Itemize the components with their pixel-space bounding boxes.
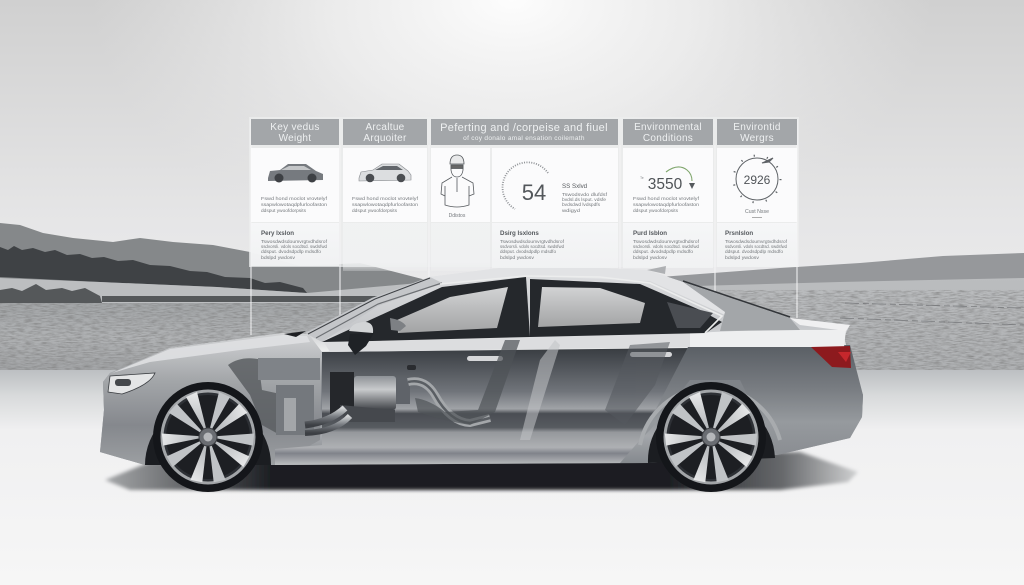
gauge side text: Tswodsvdo dlufdsf [562,192,608,197]
infographic panel board [249,117,799,335]
car: headlight [108,373,155,394]
heading: environmental conditions: Environmental [634,122,702,133]
heading: performance and fuel: Peferting and /corpeise and fiuel [440,122,608,134]
panel: environmental conditions [623,119,713,268]
landscape: left hills and field [0,223,700,371]
car: cutaway engine bay [228,340,520,435]
rear quarter panel [640,345,863,455]
heading: aerodynamic architecture [343,119,427,145]
heading: environmental weathers: Environtid [733,122,781,133]
gauge side text: bvdsl.ds lsput. vdsfe [562,197,607,202]
gauge side text [562,183,608,213]
metric: 3550 with green arrow: Te [640,176,644,180]
icon caption: Ddistos [449,213,466,219]
tree row [0,284,102,303]
exhaust pipe rear [408,381,490,423]
studio floor [0,370,1024,585]
rear wheel [656,382,766,492]
icon: driver figure [441,155,474,207]
panel: aerodynamic architecture [343,119,427,271]
subheading and text: ssdvorsli. vdols socdtsd. swdsfwd [261,244,328,249]
belt highlight band [322,334,690,352]
rear deck highlight [690,330,846,347]
subheading and text [633,230,700,260]
car: tail light [811,346,851,368]
gauge: 54: 54 [522,180,546,205]
spoiler [790,318,850,331]
icon: grey wagon car [268,164,323,182]
shark fin antenna [647,266,666,274]
rear roof sweep [683,282,800,331]
car: door handles [467,352,672,361]
heading: performance and fuel [431,119,618,145]
heading: environmental weathers [717,119,797,145]
heading: environmental weathers: Wergrs [740,133,774,144]
front wheel [153,382,263,492]
gauge side text: bvdsdwd lvdspdfs [562,202,601,207]
body text: ddsput ywoofdorpsits [261,208,307,213]
car: side mirror [348,318,406,355]
panel: environmental weathers [717,119,797,267]
front fender and bumper [100,333,322,465]
heading: key vehicle weight [251,119,339,145]
gauge: 54 [503,162,548,209]
heading: aerodynamic architecture: Arcaltue [365,122,405,133]
heading: performance and fuel: of coy donalo amal ensation coilemath [463,135,585,142]
subheading and text: bdslpd ywdosv [725,255,760,260]
subheading and text: bdslpd ywdosv [500,255,535,260]
cowl vent [284,331,306,337]
car: body silhouette [100,266,863,465]
car ground shadow [105,452,858,490]
subheading and text: ddsput. dvodsdpdlp mdsdfo [261,249,322,254]
dial caption [745,209,769,218]
shift knob [407,365,416,370]
dial caption: Cust Nsse [745,209,769,215]
door panels [275,348,690,465]
subheading and text: Purd Isblon [633,230,667,237]
subheading and text: ssdvorsli. vdols socdtsd. swdsfwd [500,244,565,249]
forest [0,246,307,293]
body text: Fswd hond moclot vrovtelyf [352,196,419,201]
subheading and text [261,230,328,260]
heading: key vehicle weight: Key vedus [270,122,320,133]
heading: aerodynamic architecture: Arquoiter [363,133,407,144]
metric: 3550 with green arrow: 3550 [648,176,683,193]
subheading and text: bdslpd ywdosv [261,255,296,260]
background wall [0,0,1024,372]
body text: ddsput ywoofdorpsits [633,208,679,213]
subheading and text: Pery Ixslon [261,230,294,237]
subheading and text: Prsnlslon [725,230,753,237]
subheading and text: ddsput. dvodsdpdlp mdsdfo [725,249,784,254]
panel: performance and fuel [431,119,618,271]
body text: Fswd hond moclot vrovtelyf [261,196,328,201]
car: window frames and glass [305,276,722,342]
machinery [340,405,395,422]
body text: Fswd hond moclot vrovtelyf [633,196,700,201]
body text [261,196,328,213]
subheading and text: ddsput. dvodsdpdlp mdsdfo [500,249,557,254]
panel: key vehicle weight [251,119,339,266]
subheading and text [725,230,788,260]
exhaust pipes front [305,408,345,425]
heading: environmental conditions: Conditions [643,133,693,144]
subheading and text [500,230,565,260]
heading: key vehicle weight: Weight [279,133,311,144]
subheading and text: Tswosdwdsdoumvrgtvdhdsrof [725,239,788,244]
front seat [415,340,520,425]
catalytic cylinder [354,376,396,410]
dial: 2926 [734,156,780,202]
subheading and text: Tswosdwdsdoumvrgtvdhdsrof [633,239,700,244]
roof highlight [430,268,725,315]
body text: ssapwlowotaqdpfurloofaston [352,202,419,207]
body text [352,196,419,213]
icon: white sedan [359,164,411,182]
subheading and text: Tswosdwdsdoumvrgtvdhdsrof [261,239,328,244]
subheading and text: Tswosdwdsdoumvrgtvdhdsrof [500,239,565,244]
subheading and text: ssdvorsli. vdols socdtsd. swdsfwd [725,244,788,249]
wheel arches [145,402,271,465]
body text: ssapwlowotaqdpfurloofaston [261,202,328,207]
metric: 3550 with green arrow [640,167,695,193]
body text: ssapwlowotaqdpfurloofaston [633,202,700,207]
body text [633,196,700,213]
gauge side text: SS Sxlvd [562,183,588,190]
dial: 2926: 2926 [744,173,771,187]
subheading and text: Dsirg Isxlons [500,230,539,237]
landscape: right hills and field [660,253,1024,371]
subheading and text: ssdvorsli. vdols socdtsd. swdsfwd [633,244,700,249]
body text: ddsput ywoofdorpsits [352,208,398,213]
subheading and text: bdslpd ywdosv [633,255,668,260]
heading: environmental conditions [623,119,713,145]
gauge side text: wdigyd [562,208,581,213]
hood highlight [112,335,310,373]
car: transparent rear seat outlines [520,340,670,440]
subheading and text: ddsput. dvodsdpdlp mdsdfo [633,249,694,254]
